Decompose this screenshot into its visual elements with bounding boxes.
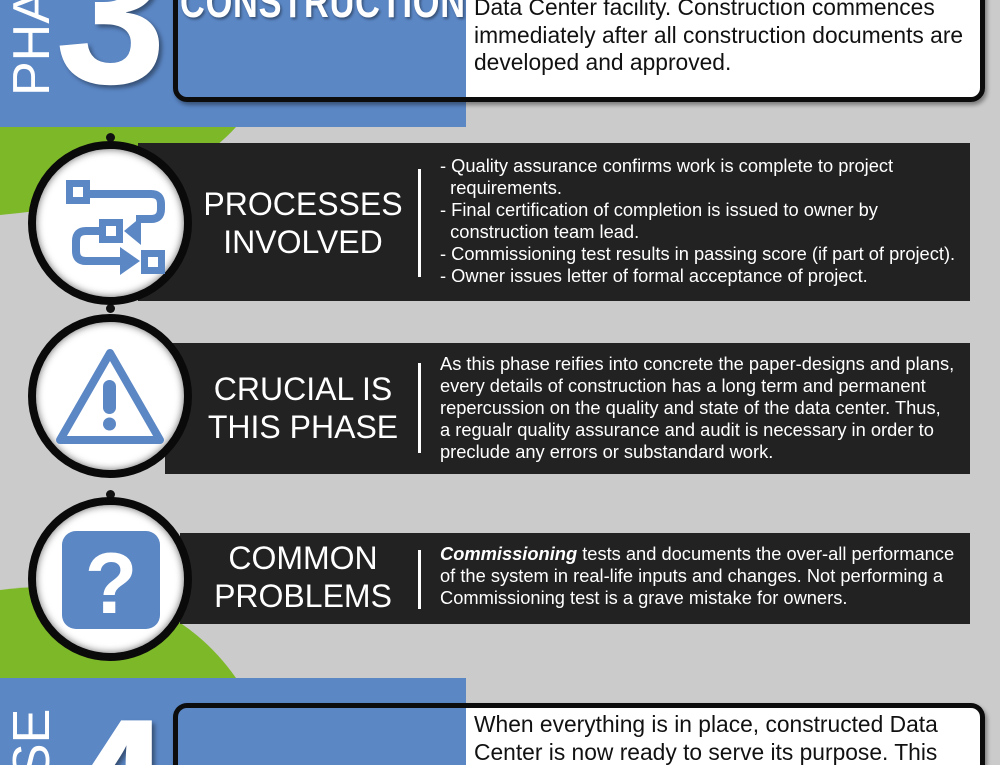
phase 4 label	[3, 700, 170, 765]
phase 4 description	[474, 711, 938, 765]
panel: processes involved	[138, 143, 970, 301]
panel: common problems: Commissioning test is a grave mistake for owners.	[440, 587, 847, 608]
panel: crucial is this phase	[165, 343, 970, 474]
panel: crucial is this phase: a regualr quality assurance and audit is necessary in order to	[440, 419, 934, 440]
phase 3 description	[474, 0, 963, 75]
phase 4 box	[173, 703, 985, 765]
panel: processes involved: INVOLVED	[223, 224, 383, 260]
panel: common problems: PROBLEMS	[214, 578, 392, 614]
panel: common problems: of the system in real-life inputs and changes. Not performing a	[440, 565, 943, 586]
phase 3 description: developed and approved.	[474, 49, 731, 75]
panel: common problems: COMMON	[228, 540, 378, 576]
phase 4 header band	[0, 678, 466, 765]
icon: warning	[28, 314, 192, 478]
phase 3 box	[173, 0, 985, 102]
connector dots	[106, 133, 115, 142]
panel: processes involved: - Owner issues letter of formal acceptance of project.	[440, 265, 868, 286]
panel: crucial is this phase: THIS PHASE	[208, 409, 398, 445]
panel: processes involved: - Final certification of completion is issued to owner by	[440, 199, 878, 220]
panel: crucial is this phase: preclude any errors or substandard work.	[440, 441, 773, 462]
phase 4 description: When everything is in place, constructed Data	[474, 711, 938, 737]
icon: question	[28, 497, 192, 661]
panel: processes involved: requirements.	[450, 177, 562, 198]
panel: processes involved: - Quality assurance confirms work is complete to project	[440, 155, 893, 176]
panel: processes involved: PROCESSES	[203, 186, 403, 222]
icon: question: ?	[85, 536, 137, 632]
phase 3 header band	[0, 0, 466, 127]
panel: crucial is this phase: repercussion on the quality and state of the data center. Thus,	[440, 397, 941, 418]
panel: common problems	[180, 533, 970, 624]
phase 4 description: Center is now ready to serve its purpose. This	[474, 738, 937, 764]
panel: processes involved: - Commissioning test results in passing score (if part of project).	[440, 243, 955, 264]
icon: process flow	[28, 141, 192, 305]
panel: processes involved: construction team lead.	[450, 221, 639, 242]
panel: crucial is this phase: As this phase reifies into concrete the paper-designs and plans,	[440, 353, 954, 374]
phase 3 label	[3, 0, 166, 126]
panel: common problems: Commissioning tests and documents the over-all performance	[440, 543, 954, 564]
panel: crucial is this phase: every details of construction has a long term and permanent	[440, 375, 926, 396]
panel: crucial is this phase: CRUCIAL IS	[214, 371, 392, 407]
phase 3 description: immediately after all construction documents are	[474, 22, 963, 48]
